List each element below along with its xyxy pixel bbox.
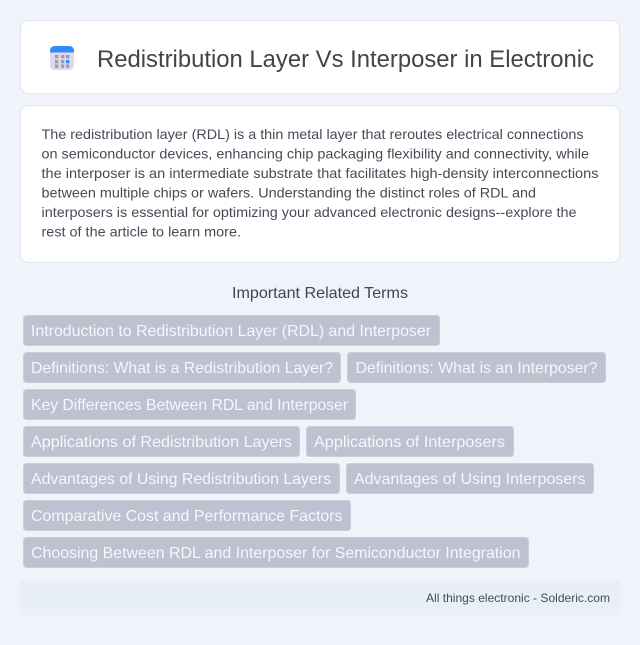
chip: definition of interposer	[348, 352, 606, 382]
heading: related terms: Important Related Terms	[232, 285, 408, 302]
footer: All things electronic - Solderic.com	[426, 591, 610, 605]
chip: advantages of interposers: Advantages of Using Interposers	[354, 471, 586, 488]
chip: definition of RDL	[24, 352, 340, 382]
chip: advantages of RDL	[24, 464, 340, 494]
text block: description: rest of the article to learn more.	[42, 224, 241, 240]
chip: cost and performance	[24, 500, 350, 530]
panel: header	[20, 20, 620, 94]
title: Redistribution Layer Vs Interposer in Electronic	[97, 46, 594, 73]
chip: applications of RDL: Applications of Redistribution Layers	[31, 434, 292, 451]
text block: description: The redistribution layer (RDL) is a thin metal layer that reroutes electrical connections	[42, 126, 584, 142]
chip: definition of interposer: Definitions: What is an Interposer?	[356, 360, 598, 377]
chip: advantages of RDL: Advantages of Using Redistribution Layers	[31, 471, 331, 488]
chip: applications of RDL	[24, 426, 300, 456]
chip: cost and performance: Comparative Cost and Performance Factors	[31, 508, 342, 525]
chip: key differences	[24, 390, 356, 420]
text block: description: interposers is essential for optimizing your advanced electronic designs--explore the	[42, 204, 577, 220]
icon: calendar	[50, 46, 74, 70]
footer	[20, 581, 620, 615]
text block: description: between multiple chips or wafers. Understanding the distinct roles of RDL and	[42, 184, 536, 200]
related terms chips	[24, 316, 606, 568]
chip: key differences: Key Differences Between RDL and Interposer	[31, 397, 349, 414]
chip: choosing: Choosing Between RDL and Interposer for Semiconductor Integration	[31, 545, 520, 562]
text block: description: on semiconductor devices, enhancing chip packaging flexibility and connectivity, while	[42, 146, 589, 162]
chip: applications of interposers: Applications of Interposers	[314, 434, 505, 451]
chip: definition of RDL: Definitions: What is a Redistribution Layer?	[31, 360, 333, 377]
text block: description	[42, 126, 598, 240]
chip: introduction	[24, 316, 440, 346]
chip: advantages of interposers	[346, 464, 594, 494]
chip: applications of interposers	[306, 426, 514, 456]
text block: description: the interposer is an intermediate substrate that facilitates high-density interconnections	[42, 165, 598, 181]
panel: description	[20, 106, 620, 262]
chip: choosing	[24, 538, 528, 568]
chip: introduction: Introduction to Redistribution Layer (RDL) and Interposer	[31, 323, 432, 340]
